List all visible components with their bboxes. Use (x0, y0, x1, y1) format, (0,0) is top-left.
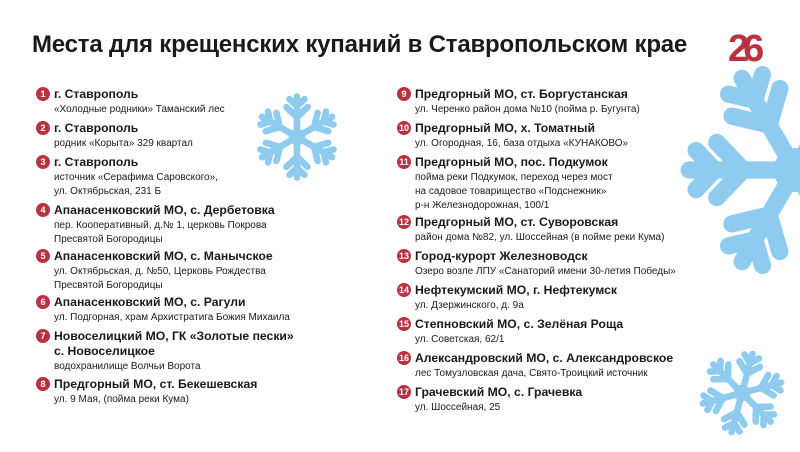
text: 10 (399, 123, 409, 133)
item 16: лес Томузловская дача, Свято-Троицкий источник (415, 368, 648, 379)
item 7: водохранилище Волчьи Ворота (54, 361, 201, 372)
item 17: Грачевский МО, с. Грачевка (415, 385, 582, 399)
item 6 (36, 295, 290, 323)
item 8: ул. 9 Мая, (пойма реки Кума) (54, 394, 189, 405)
text: 11 (399, 157, 409, 167)
item 9: ул. Черенко район дома №10 (пойма р. Бугунта) (415, 104, 640, 115)
item 11 (397, 155, 613, 211)
item 11: р-н Железнодорожная, 100/1 (415, 200, 549, 211)
item 1: г. Ставрополь (54, 87, 138, 101)
item 2: г. Ставрополь (54, 121, 138, 135)
item 4: пер. Кооперативный, д.№ 1, церковь Покрова (54, 220, 267, 231)
list: left column (36, 87, 294, 405)
text: 1 (40, 89, 46, 99)
item 17 (397, 385, 582, 413)
item 3: ул. Октябрьская, 231 Б (54, 186, 161, 197)
item 4: Апанасенковский МО, с. Дербетовка (54, 203, 275, 217)
item 2: родник «Корыта» 329 квартал (54, 138, 193, 149)
text: 12 (399, 217, 409, 227)
logo: 26: 26 (728, 28, 758, 70)
text: 6 (40, 297, 46, 307)
item 9: Предгорный МО, ст. Боргустанская (415, 87, 628, 101)
item 12: район дома №82, ул. Шоссейная (в пойме реки Кума) (415, 232, 664, 243)
item 14: Нефтекумский МО, г. Нефтекумск (415, 283, 617, 297)
item 3 (36, 155, 218, 197)
item 1 (36, 87, 225, 115)
text: 9 (401, 89, 406, 99)
item 7: с. Новоселицкое (54, 344, 155, 358)
snowflake: big right (689, 65, 800, 275)
item 3: источник «Серафима Саровского», (54, 172, 218, 183)
item 15 (397, 317, 624, 345)
item 1: «Холодные родники» Таманский лес (54, 104, 225, 115)
item 6: Апанасенковский МО, с. Рагули (54, 295, 245, 309)
item 5: Пресвятой Богородицы (54, 280, 163, 291)
item 10: Предгорный МО, х. Томатный (415, 121, 595, 135)
text: 13 (399, 251, 409, 261)
item 6: ул. Подгорная, храм Архистратига Божия Михаила (54, 312, 290, 323)
item 15: Степновский МО, с. Зелёная Роща (415, 317, 623, 331)
text: 15 (399, 319, 409, 329)
item 13 (397, 249, 676, 277)
item 7 (36, 329, 294, 372)
item 4 (36, 203, 275, 245)
item 5: Апанасенковский МО, с. Манычское (54, 249, 273, 263)
item 12: Предгорный МО, ст. Суворовская (415, 215, 618, 229)
item 11: пойма реки Подкумок, переход через мост (415, 172, 613, 183)
text: 8 (40, 379, 46, 389)
text: 14 (399, 285, 409, 295)
title: Места для крещенских купаний в Ставропольском крае (32, 31, 687, 58)
item 7: Новоселицкий МО, ГК «Золотые пески» (54, 329, 294, 343)
item 14: ул. Дзержинского, д. 9а (415, 300, 524, 311)
item 4: Пресвятой Богородицы (54, 234, 163, 245)
item 5 (36, 249, 273, 291)
text: 5 (40, 251, 46, 261)
item 13: Город-курорт Железноводск (415, 249, 588, 263)
item 8 (36, 377, 257, 405)
text: 4 (40, 205, 46, 215)
item 16 (397, 351, 673, 379)
text: 16 (399, 353, 409, 363)
snowflake: small bottom (693, 343, 791, 443)
item 13: Озеро возле ЛПУ «Санаторий имени 30-летия Победы» (415, 266, 676, 277)
item 10 (397, 121, 628, 149)
snowflake: small top (257, 97, 337, 177)
text: 17 (399, 387, 409, 397)
text: 7 (40, 331, 46, 341)
item 8: Предгорный МО, ст. Бекешевская (54, 377, 257, 391)
item 17: ул. Шоссейная, 25 (415, 402, 500, 413)
item 11: Предгорный МО, пос. Подкумок (415, 155, 608, 169)
text: 3 (40, 157, 46, 167)
item 2 (36, 121, 193, 149)
item 3: г. Ставрополь (54, 155, 138, 169)
item 15: ул. Советская, 62/1 (415, 334, 504, 345)
item 5: ул. Октябрьская, д. №50, Церковь Рождества (54, 266, 266, 277)
text: 2 (40, 123, 46, 133)
item 9 (397, 87, 640, 115)
list: right column (397, 87, 676, 413)
item 10: ул. Огородная, 16, база отдыха «КУНАКОВО» (415, 138, 628, 149)
item 11: на садовое товарищество «Подснежник» (415, 186, 606, 197)
item 16: Александровский МО, с. Александровское (415, 351, 673, 365)
item 14 (397, 283, 617, 311)
item 12 (397, 215, 664, 243)
